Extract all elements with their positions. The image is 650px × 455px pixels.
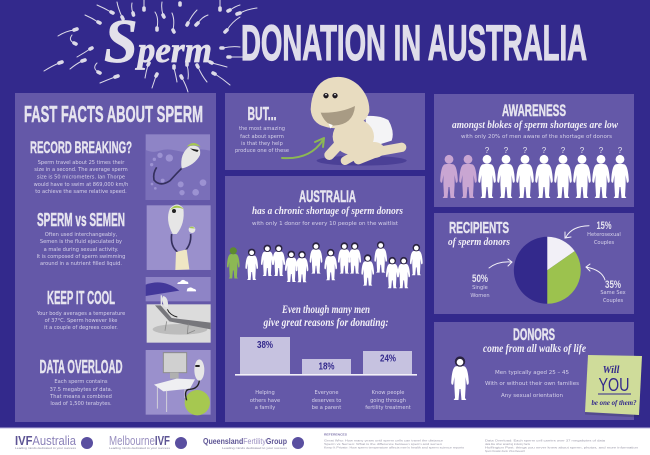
subheading: of sperm donors: of sperm donors <box>448 236 510 248</box>
text block: sperm vs semen: Often used interchangeably, <box>45 232 118 238</box>
pie chart: recipients <box>514 237 581 304</box>
text block: keep it cool: of 37°C. Sperm however like <box>45 318 117 324</box>
callout: fifteen percent <box>565 220 621 246</box>
panel: awareness <box>434 94 634 207</box>
bar chart: reasons: deserves to <box>312 398 341 404</box>
heading: australia: AUSTRALIA <box>299 187 356 206</box>
heading: donors: DONORS <box>513 325 555 344</box>
illustration: beach lounger <box>146 277 211 343</box>
references: data like other amazing industry facts <box>485 443 531 446</box>
text: one donor per ten: with only 1 donor for every 10 people on the waitlist <box>252 221 398 227</box>
text block: amazing fact <box>235 126 289 154</box>
references <box>324 432 639 453</box>
text block: keep it cool: KEEP IT COOL <box>47 288 115 308</box>
pictogram: awareness people: ? <box>485 146 490 155</box>
pictogram: awareness people: ? <box>618 146 623 155</box>
text block: sperm vs semen: around in a nutrient filled liquid. <box>40 261 122 267</box>
bar chart: reasons: fertility treatment <box>365 405 411 411</box>
sticky note: will you be one of them: YOU <box>598 375 630 395</box>
callout: fifteen percent: Heterosexual <box>587 232 621 238</box>
text block: record breaking: RECORD BREAKING? <box>30 138 132 157</box>
callout: thirty-five percent: Same Sex <box>600 290 626 296</box>
callout: thirty-five percent: 35% <box>605 279 621 291</box>
subheading: walks of life: come from all walks of life <box>483 343 586 355</box>
subheading: reasons for donating <box>263 304 389 329</box>
callout: fifty percent: Women <box>470 293 490 299</box>
bar chart: reasons: 18% <box>318 362 335 372</box>
callout: thirty-five percent: Couples <box>603 298 624 304</box>
callout: fifteen percent: 15% <box>596 220 612 232</box>
references: Sperm vs Semen: What is the difference between sperm and semen <box>324 443 443 446</box>
logo: Queensland Fertility Group: Leading minds dedicated to your success <box>222 447 288 450</box>
panel: australia <box>225 176 425 422</box>
pictogram: awareness people: ? <box>523 146 528 155</box>
bar chart: reasons: Know people <box>372 390 404 396</box>
sticky note: will you be one of them: Will <box>603 365 620 376</box>
pictogram: awareness people <box>440 146 629 198</box>
text block: donor facts <box>485 370 579 399</box>
panel: recipients <box>434 213 634 314</box>
icon: donor man <box>451 356 469 400</box>
pictogram: waitlist people <box>227 241 423 288</box>
subheading: chronic shortage: has a chronic shortage of sperm donors <box>252 205 403 217</box>
references: Great Who: How many years until sperm cells can travel the distance <box>324 440 444 442</box>
bar chart: reasons: going through <box>370 398 406 404</box>
text block: sperm vs semen <box>37 210 125 267</box>
panel: fast facts <box>15 93 216 422</box>
logo: IVFAustralia: Leading minds dedicated to your success <box>15 447 77 450</box>
text block: amazing fact: is that they help <box>241 141 283 147</box>
text block: sperm vs semen: It is composed of sperm swimming <box>37 254 125 260</box>
text block: donor facts: With or without their own families <box>485 381 579 387</box>
bar chart: reasons: a family <box>255 405 275 411</box>
text block: data overload: 37.5 megabytes of data. <box>50 387 113 393</box>
references: Huffington Post: things you never knew about sperm, photos, and more information <box>485 446 639 450</box>
logo: MelbourneIVF: MelbourneIVF <box>109 434 170 448</box>
arrow: pointing to baby <box>282 138 324 158</box>
callout: fifteen percent: Couples <box>594 240 615 246</box>
callout: fifty percent <box>470 259 512 299</box>
pictogram: awareness people: ? <box>561 146 566 155</box>
icon: crawling baby <box>311 77 407 166</box>
text block: data overload: That means a combined <box>49 394 112 400</box>
illustration: sperm with towel <box>147 204 211 270</box>
bar chart: reasons: 24% <box>380 354 396 364</box>
heading: recipients: RECIPIENTS <box>449 220 509 237</box>
text block: record breaking: to achieve the same relative speed. <box>35 189 127 195</box>
references: REFERENCES <box>324 432 347 436</box>
references: Data Overload: Each sperm cell carries over 37 megabytes of data <box>485 440 606 442</box>
heading: but: BUT... <box>248 104 276 124</box>
text block: donor facts: Any sexual orientation <box>501 393 563 399</box>
callout: fifty percent: Single <box>472 285 488 291</box>
text block: amazing fact: the most amazing <box>239 126 285 132</box>
text block: record breaking: size in a second. The average sperm <box>34 167 128 173</box>
bar chart: reasons: 38% <box>257 340 273 351</box>
bar chart: reasons: be a parent <box>312 405 341 411</box>
pictogram: awareness people: ? <box>504 146 509 155</box>
pictogram: awareness people: ? <box>599 146 604 155</box>
text block: record breaking: size is 50 micrometers. Ian Thorpe <box>37 174 125 180</box>
title: Sperm: Sperm <box>104 8 212 76</box>
pictogram: awareness people: ? <box>580 146 585 155</box>
text block: amazing fact: produce one of these <box>235 148 289 154</box>
logo: Queensland Fertility Group <box>203 436 304 450</box>
callout: fifty percent: 50% <box>472 273 488 285</box>
callout: thirty-five percent <box>586 264 626 304</box>
bar chart: reasons <box>235 337 417 411</box>
text block: keep it cool <box>36 288 125 331</box>
illustration: sperm swimming <box>146 134 210 200</box>
logo: IVFAustralia: IVFAustralia <box>15 433 77 448</box>
text: twenty percent: with only 20% of men aware of the shortage of donors <box>461 134 612 140</box>
references: Sperm Donation Facts: Virtus Research <box>485 450 526 453</box>
pictogram: awareness people: ? <box>542 146 547 155</box>
text block: record breaking <box>30 138 132 195</box>
bar chart: reasons: Helping <box>255 390 275 396</box>
text block: keep it cool: it a couple of degrees cooler. <box>44 325 118 331</box>
logo: Queensland Fertility Group: QueenslandFertilityGroup <box>203 436 287 446</box>
text block: data overload: DATA OVERLOAD <box>40 357 122 377</box>
illustration: sperm at computer <box>146 350 211 415</box>
sperm illustration burst <box>44 0 257 92</box>
bar chart: reasons: others have <box>250 398 280 404</box>
panel: donors <box>434 322 634 420</box>
subheading: blokes: amongst blokes of sperm shortages are low <box>452 119 619 131</box>
text block: amazing fact: fact about sperm <box>240 134 284 140</box>
sticky note: will you be one of them <box>585 355 642 418</box>
bar chart: reasons: Everyone <box>315 390 338 396</box>
text block: sperm vs semen: SPERM vs SEMEN <box>37 210 125 230</box>
heading: fast facts: FAST FACTS ABOUT SPERM <box>24 101 203 127</box>
text block: sperm vs semen: a male during sexual activity. <box>44 247 119 253</box>
footer <box>0 428 650 455</box>
text block: data overload <box>40 357 122 407</box>
text block: data overload: Each sperm contains <box>54 379 108 385</box>
text block: keep it cool: Your body averages a temperature <box>36 311 125 317</box>
panel: but <box>225 93 425 170</box>
subheading: reasons for donating: Even though many men <box>281 304 370 316</box>
logo: MelbourneIVF: Leading minds dedicated to your success <box>109 447 171 450</box>
text block: sperm vs semen: Semen is the fluid ejaculated by <box>40 239 122 245</box>
subheading: reasons for donating: give great reasons for donating: <box>263 317 389 329</box>
text block: record breaking: Sperm travel about 25 times their <box>38 160 125 166</box>
text block: record breaking: would have to swim at 869,000 km/h <box>34 182 128 188</box>
text block: data overload: load of 1,500 terabytes. <box>50 401 112 407</box>
heading: awareness: AWARENESS <box>502 101 566 120</box>
references: Keep It Private: How sperm temperature affects men's health and sperm science reports <box>324 446 465 450</box>
text block: donor facts: Men typically aged 25 – 45 <box>495 370 569 376</box>
sticky note: will you be one of them: be one of them? <box>592 398 637 407</box>
